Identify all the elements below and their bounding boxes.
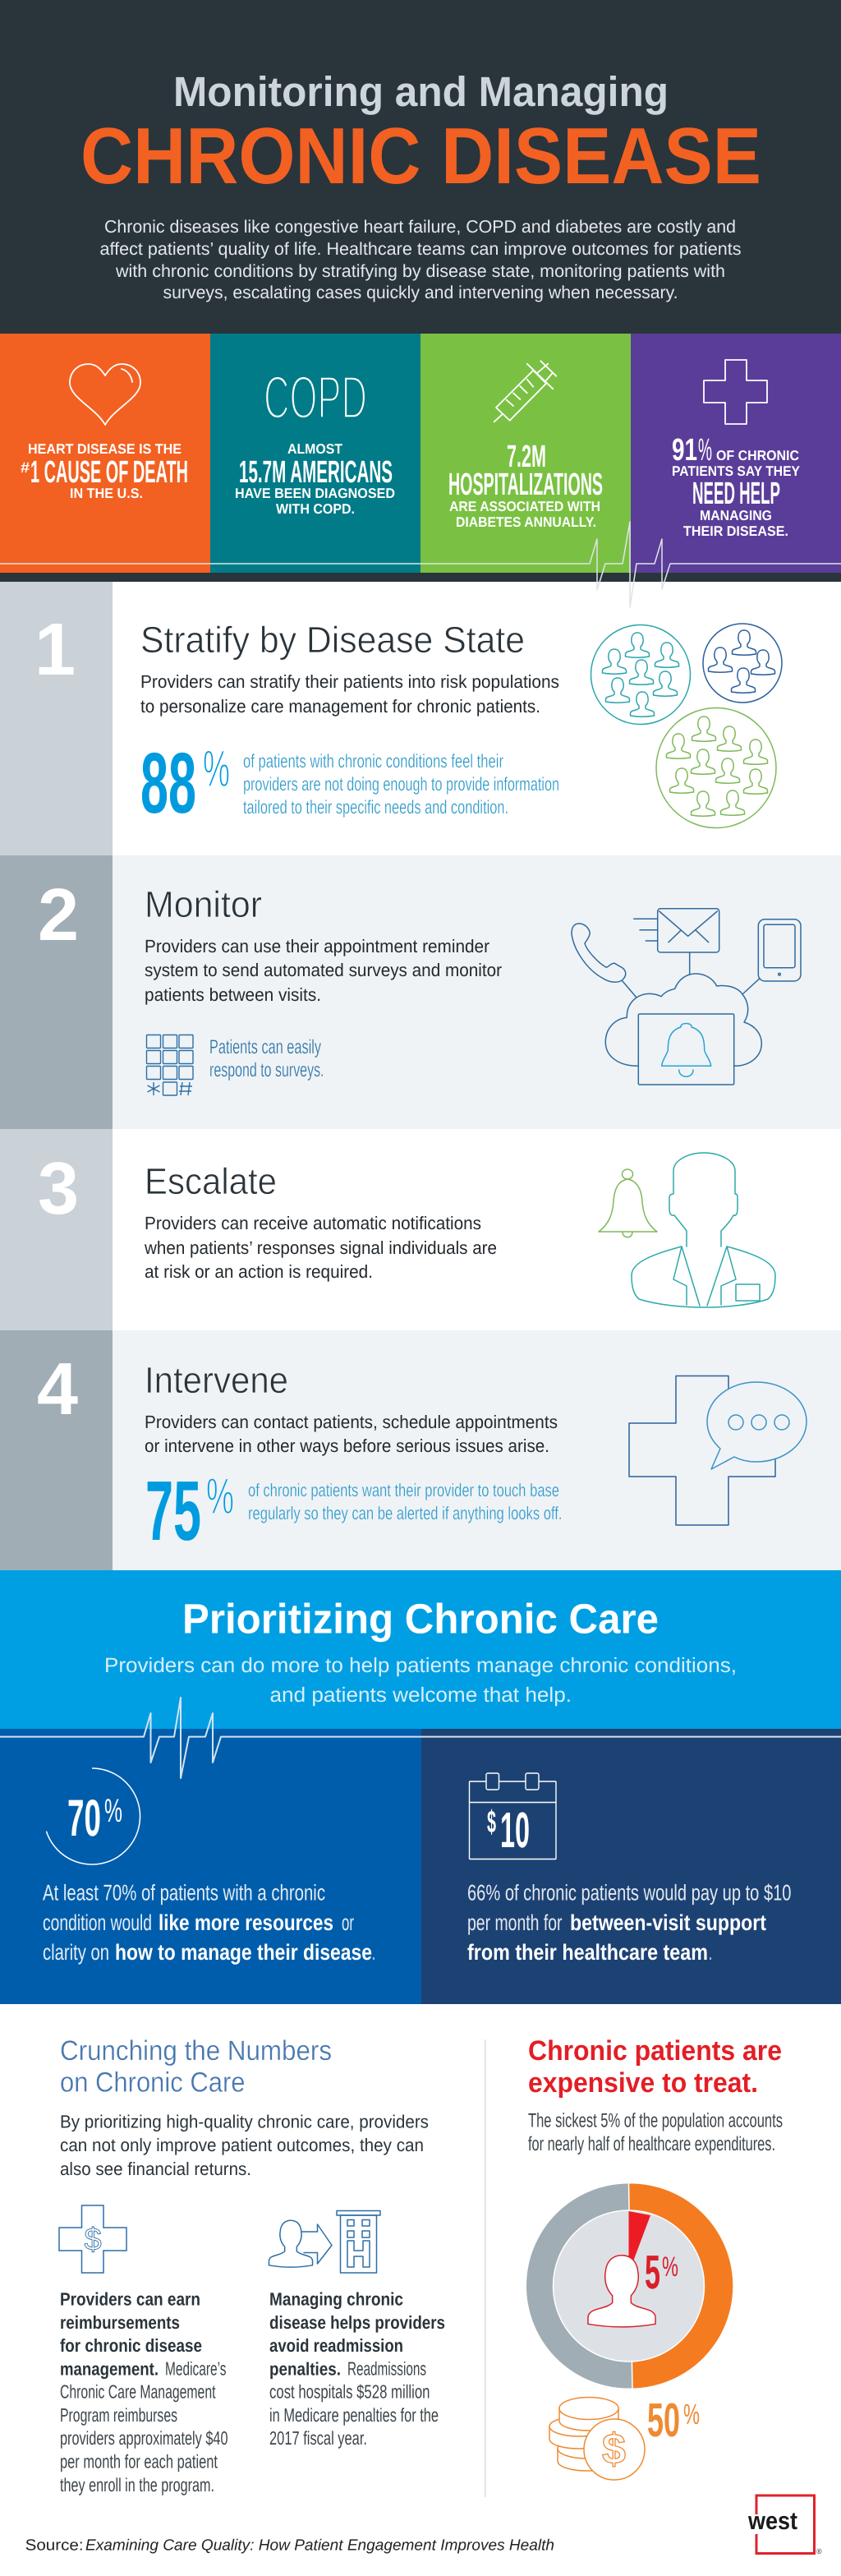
stat: 88 percent [140,735,559,832]
text: readmission penalties: in Medicare penalties for the [269,2404,439,2426]
title line one: Monitoring and Managing [173,68,669,115]
stat: 75 percent: % [206,1468,234,1525]
section: prioritizing chronic care banner [0,1570,841,1729]
step heading: Escalate [145,1160,277,1202]
stat panel: COPD [210,334,420,573]
icon: envelope [634,909,719,974]
panel text: clarity on [43,1940,109,1965]
step body text: when patients’ responses signal individuals are [144,1237,497,1258]
stat: 88 percent: providers are not doing enough to provide information [243,773,559,795]
stat text: MANAGING [700,508,772,523]
icon: navy population [703,624,782,703]
step 1 panel [0,582,841,855]
icon: person [588,2256,655,2327]
icon: speech bubble [707,1382,807,1469]
label: 5 percent: 5 [645,2246,660,2299]
label: 50 percent: 50 [647,2394,680,2447]
stat text: PATIENTS SAY THEY [672,463,801,479]
text: reimbursements: Providers can earn [60,2289,200,2310]
stat: 88 percent: % [203,740,230,798]
stat: 75 percent: regularly so they can be alerted if anything looks off. [248,1503,562,1523]
text: reimbursements: Medicare’s [165,2358,227,2380]
text: reimbursements: Program reimburses [60,2404,177,2426]
step number: 4 [37,1348,78,1431]
step body text: or intervene in other ways before serious issues arise. [145,1435,549,1456]
stat text: DIABETES ANNUALLY. [456,514,596,530]
panel text: or [342,1910,354,1935]
chart: donut 50 percent [526,2183,733,2388]
step heading: Stratify by Disease State [140,619,525,661]
step body text: to personalize care management for chronic patients. [140,696,540,717]
stat text [21,441,188,501]
icon: bell [662,1024,711,1076]
source line: Source: [25,2537,84,2555]
panel text: from their healthcare team [467,1940,708,1965]
section heading: expensive to treat. [528,2067,758,2099]
icon: phone keypad [146,1035,193,1095]
callout: respond to surveys [209,1036,324,1081]
text: reimbursements: reimbursements [60,2312,180,2333]
stat text: HEART DISEASE IS THE [28,441,182,457]
icon: calendar [470,1773,556,1859]
intro paragraph: with chronic conditions by stratifying by disease state, monitoring patients with [115,261,725,281]
intro paragraph: Chronic diseases like congestive heart failure, COPD and diabetes are costly and [104,217,736,237]
stat text: WITH COPD. [276,501,355,517]
section heading: Crunching the Numbers [60,2035,332,2067]
panel text: between-visit support [570,1910,766,1935]
stat text [235,441,395,517]
icon: cloud with phone, mail and tablet [572,909,801,1085]
step body text: at risk or an action is required. [145,1261,373,1282]
step body text [145,936,502,1005]
step body text: Providers can use their appointment reminder [145,936,489,956]
dark divider band [0,573,841,582]
panel: 70 percent resources [0,1729,421,2004]
header panel [0,0,841,334]
icon: green population [656,708,776,828]
chart: 70 percent arc [46,1768,140,1864]
calendar label: 10 [500,1802,530,1858]
text: reimbursements [60,2289,228,2495]
step heading: Monitor [145,883,262,925]
stat text: HOSPITALIZATIONS [448,468,603,502]
heartbeat line across blue sections [0,1698,841,1778]
icon: teal population [591,624,690,725]
intro paragraph: can not only improve patient outcomes, they can [60,2135,424,2155]
section heading: Prioritizing Chronic Care [182,1596,659,1642]
arc label: % [104,1793,122,1829]
icon: cross with dollar sign [59,2205,126,2273]
intro paragraph: surveys, escalating cases quickly and intervening when necessary. [163,283,678,302]
intro paragraph: also see financial returns. [60,2159,251,2179]
intro text [528,2110,783,2155]
label: 5 percent: % [662,2251,678,2283]
icon: coins: $ [602,2426,626,2473]
logo: west [747,2495,822,2555]
calendar label: $ [487,1805,496,1840]
step number: 1 [34,609,76,691]
icon: medical cross [704,360,767,424]
step number: 2 [38,874,79,956]
section heading [528,2035,782,2099]
intro paragraph [100,217,741,302]
step body text: system to send automated surveys and monitor [145,960,502,980]
step body text: patients between visits. [145,984,321,1005]
stat text: 15.7M AMERICANS [239,455,393,490]
stat text: IN THE U.S. [70,486,143,501]
text: readmission penalties [269,2289,445,2449]
panel text [43,1880,375,1965]
stat: 88 percent: 88 [140,735,196,832]
vertical divider [485,2039,486,2497]
panel: chronic patients are expensive [526,2035,783,2480]
text: reimbursements: providers approximately $40 [60,2427,228,2449]
icon: phone handset [572,924,636,998]
intro paragraph: By prioritizing high-quality chronic care, providers [60,2111,429,2131]
icon: cross with speech bubble [629,1376,807,1525]
text: readmission penalties: Readmissions [347,2358,426,2380]
intro paragraph: affect patients’ quality of life. Healthcare teams can improve outcomes for patients [100,239,741,259]
step body text [140,671,559,717]
icon: cloud [605,974,761,1066]
step body text [144,1213,497,1282]
step 2 panel [0,855,841,1129]
section heading [60,2035,332,2099]
step number: 3 [38,1148,79,1230]
step body text: Providers can contact patients, schedule appointments [145,1412,558,1432]
icon: coins [549,2398,645,2480]
stat text: # [21,459,30,476]
panel text: per month for [467,1910,563,1935]
logo: west: ® [816,2547,822,2555]
stat: 75 percent: 75 [145,1463,201,1558]
source line: Examining Care Quality: How Patient Engagement Improves Health [85,2537,554,2555]
stat: 75 percent [145,1463,562,1558]
intro paragraph [60,2111,429,2179]
text: readmission penalties: 2017 fiscal year. [269,2427,367,2449]
text: reimbursements: they enroll in the program. [60,2474,214,2495]
stat text: THEIR DISEASE. [683,523,788,539]
text: readmission penalties: Managing chronic [269,2289,403,2310]
stat text: 1 CAUSE OF DEATH [30,455,188,490]
text: reimbursements: management. [60,2358,159,2380]
stat text: ARE ASSOCIATED WITH [449,499,600,514]
stat: 88 percent: tailored to their specific needs and condition. [243,796,508,818]
stat text [448,440,603,530]
step 3 panel [0,1129,841,1330]
stat text [672,433,801,539]
stat text: % [698,433,712,468]
icon: patient to hospital [269,2210,380,2273]
calendar label [487,1802,530,1858]
stat: 75 percent: of chronic patients want their provider to touch base [248,1480,559,1500]
section heading: on Chronic Care [60,2067,245,2099]
section intro: and patients welcome that help. [269,1684,572,1707]
text: reimbursements: per month for each patient [60,2450,218,2472]
panel text: like more resources [159,1910,333,1935]
title line two: CHRONIC DISEASE [80,111,761,200]
chart: 5 percent wedge [629,2211,650,2261]
callout: respond to surveys: respond to surveys. [209,1059,324,1081]
icon: COPD letters: COPD [264,363,367,431]
stat text: ALMOST [287,441,343,457]
stat: 88 percent: of patients with chronic conditions feel their [243,750,503,772]
icon: heart [70,364,140,425]
stat panel: heart disease [0,334,210,573]
text: readmission penalties: disease helps providers [269,2312,445,2333]
step body text [145,1412,558,1456]
step body text: Providers can receive automatic notifications [145,1213,481,1233]
stat panel: need help [631,334,841,573]
logo: west: west [747,2508,797,2535]
panel: crunching the numbers [59,2035,445,2495]
panel text: how to manage their disease [115,1940,372,1965]
section intro [104,1654,737,1707]
icon: syringe [494,361,556,422]
stat text: 7.2M [507,440,546,474]
panel text: . [709,1940,712,1965]
section heading: Chronic patients are [528,2035,782,2067]
panel text: . [372,1940,375,1965]
arc label: 70 [67,1790,101,1847]
text: readmission penalties: avoid readmission [269,2335,403,2356]
panel text: At least 70% of patients with a chronic [43,1880,325,1905]
section intro: Providers can do more to help patients manage chronic conditions, [104,1654,737,1677]
text: reimbursements: for chronic disease [60,2335,202,2356]
icon: cross with dollar sign: $ [84,2223,102,2257]
icon: tablet [742,919,801,994]
stat text: 91 [672,433,697,468]
callout: respond to surveys: Patients can easily [209,1036,321,1058]
step body text: Providers can stratify their patients into risk populations [140,671,559,692]
label: 50 percent: % [683,2399,700,2431]
icon: doctor [632,1153,775,1307]
panel text: condition would [43,1910,152,1935]
heartbeat line across stat panels [0,522,841,607]
step heading: Intervene [145,1359,288,1401]
stat text: OF CHRONIC [716,448,799,463]
panel: 10 dollar support [421,1729,841,2004]
icon: green alert bell [599,1169,657,1237]
stat panel: diabetes [420,334,631,573]
panel text [467,1880,792,1965]
icon: risk population circles [591,624,782,828]
icon: notification screen [638,1014,734,1085]
text: readmission penalties: cost hospitals $528 million [269,2381,430,2403]
text: reimbursements: Chronic Care Management [60,2381,216,2403]
stat text: HAVE BEEN DIAGNOSED [235,486,395,501]
text: readmission penalties: penalties. [269,2358,341,2380]
step 4 panel [0,1330,841,1570]
